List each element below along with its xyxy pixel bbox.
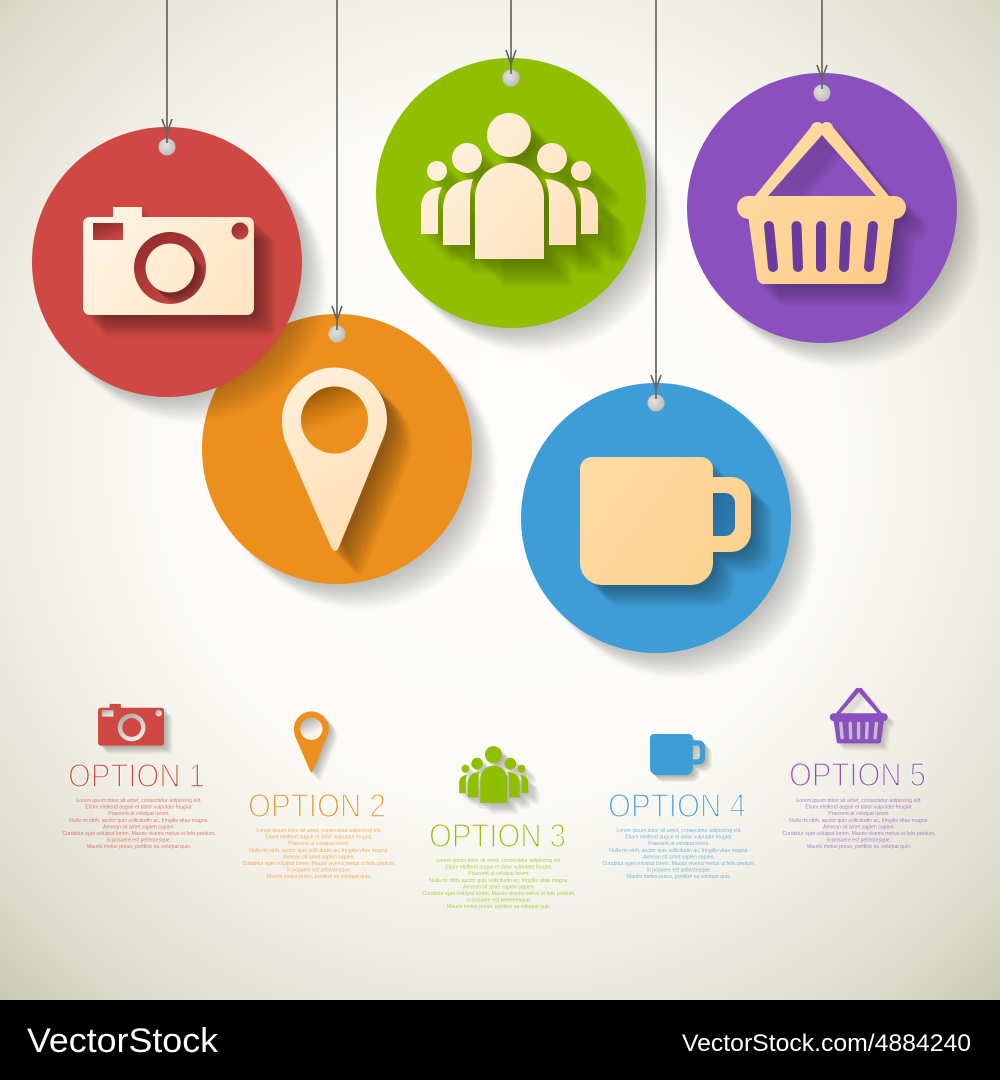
body text: option 4: in posuere est pellentesque.	[647, 868, 711, 874]
body text: option 1: Mauris metus purus, porttitor eu volutpat quis.	[87, 844, 191, 850]
heading: option 3: OPTION 3	[429, 817, 566, 854]
option 5 block	[782, 688, 936, 850]
body text: option 1: Etiam eleifend augue et dolor vulputate feugiat.	[85, 805, 193, 811]
body text: option 2: Praesent at volutpat lorem.	[288, 841, 350, 847]
body text: option 4: Praesent at volutpat lorem.	[648, 841, 710, 847]
small icon: cup	[650, 734, 712, 782]
string: purple tag	[817, 0, 827, 89]
body text: option 3: Mauris metus purus, porttitor eu volutpat quis.	[447, 904, 551, 910]
eyelet: blue tag hole	[648, 394, 664, 412]
tag: green people disc	[376, 0, 670, 352]
string: orange tag	[332, 0, 342, 330]
body text: option 4: Mauris metus purus, porttitor eu volutpat quis.	[627, 874, 731, 880]
body text: option 1: Curabitur eget volutpat lorem. Mauris viverra metus ut felis pretium,	[62, 831, 216, 837]
footer bar	[0, 1000, 1000, 1080]
body text: option 2: in posuere est pellentesque.	[287, 868, 351, 874]
body text: option 4: Aenean sit amet sapien sapien.	[643, 854, 715, 860]
tag: orange location disc	[202, 0, 496, 608]
body text: option 2: Aenean sit amet sapien sapien.	[283, 854, 355, 860]
body text: option 4: Etiam eleifend augue et dolor vulputate feugiat.	[625, 835, 733, 841]
small icon: location pin	[294, 711, 337, 780]
small icon: camera	[98, 704, 172, 754]
body text: option 5: in posuere est pellentesque.	[827, 838, 891, 844]
body text: option 2: Etiam eleifend augue et dolor vulputate feugiat.	[265, 835, 373, 841]
icon: camera	[83, 207, 275, 336]
icon: location pin	[282, 368, 411, 575]
string: blue tag	[651, 0, 661, 399]
body text: option 4: Curabitur eget volutpat lorem. Mauris viverra metus ut felis pretium,	[602, 861, 756, 867]
body text: option 5: Etiam eleifend augue et dolor vulputate feugiat.	[805, 805, 913, 811]
eyelet: orange tag hole	[328, 326, 346, 342]
eyelet: purple tag hole	[814, 84, 830, 102]
body text: option 4: Lorem ipsum dolor sit amet, consectetur adipiscing elit.	[616, 828, 742, 834]
footer image id: VectorStock.com/4884240	[682, 1030, 971, 1057]
body text: option 3: Nulla mi nibh, auctor quis sollicitudin ac, fringilla vitae magna.	[429, 878, 569, 884]
eyelet: green tag hole	[502, 70, 520, 86]
body text: option 1: in posuere est pellentesque.	[107, 838, 171, 844]
string: red tag	[162, 0, 172, 143]
body text: option 5: Aenean sit amet sapien sapien.	[823, 824, 895, 830]
string: green tag	[506, 0, 516, 74]
body text: option 3: Curabitur eget volutpat lorem. Mauris viverra metus ut felis pretium,	[422, 891, 576, 897]
option 3 block	[422, 746, 576, 910]
body text: option 5: Lorem ipsum dolor sit amet, consectetur adipiscing elit.	[796, 798, 922, 804]
heading: option 5: OPTION 5	[789, 756, 926, 793]
body text: option 5: Nulla mi nibh, auctor quis sollicitudin ac, fringilla vitae magna.	[789, 818, 929, 824]
option 2 block	[242, 711, 396, 880]
tag: blue cup disc	[521, 0, 815, 677]
footer brand: VectorStock	[27, 1022, 219, 1060]
body text: option 1: Aenean sit amet sapien sapien.	[103, 824, 175, 830]
body text: option 1: Nulla mi nibh, auctor quis sollicitudin ac, fringilla vitae magna.	[69, 818, 209, 824]
body text: option 2: Curabitur eget volutpat lorem. Mauris viverra metus ut felis pretium,	[242, 861, 396, 867]
small icon: shopping basket	[830, 688, 895, 751]
eyelet: red tag hole	[158, 138, 176, 156]
body text: option 1: Lorem ipsum dolor sit amet, consectetur adipiscing elit.	[76, 798, 202, 804]
body text: option 3: Lorem ipsum dolor sit amet, consectetur adipiscing elit.	[436, 858, 562, 864]
heading: option 2: OPTION 2	[248, 787, 386, 824]
small icon: group of people	[459, 746, 539, 814]
body text: option 5: Mauris metus purus, porttitor eu volutpat quis.	[807, 844, 911, 850]
icon: shopping basket	[737, 122, 927, 305]
option 4 block	[602, 734, 756, 880]
heading: option 4: OPTION 4	[608, 787, 746, 824]
body text: option 4: Nulla mi nibh, auctor quis sollicitudin ac, fringilla vitae magna.	[609, 848, 749, 854]
body text: option 2: Nulla mi nibh, auctor quis sollicitudin ac, fringilla vitae magna.	[249, 848, 389, 854]
icon: group of people	[421, 113, 626, 287]
icon: cup	[580, 457, 772, 606]
body text: option 2: Mauris metus purus, porttitor eu volutpat quis.	[267, 874, 371, 880]
body text: option 3: Praesent at volutpat lorem.	[468, 871, 530, 877]
tag: red camera disc	[32, 0, 326, 421]
body text: option 3: Etiam eleifend augue et dolor vulputate feugiat.	[445, 865, 553, 871]
option 1 block	[62, 704, 216, 850]
body text: option 5: Praesent at volutpat lorem.	[828, 811, 890, 817]
body text: option 3: in posuere est pellentesque.	[467, 898, 531, 904]
body text: option 2: Lorem ipsum dolor sit amet, consectetur adipiscing elit.	[256, 828, 382, 834]
body text: option 1: Praesent at volutpat lorem.	[108, 811, 170, 817]
heading: option 1: OPTION 1	[68, 757, 205, 794]
body text: option 5: Curabitur eget volutpat lorem. Mauris viverra metus ut felis pretium,	[782, 831, 936, 837]
body text: option 3: Aenean sit amet sapien sapien.	[463, 884, 535, 890]
tag: purple basket disc	[687, 0, 981, 367]
